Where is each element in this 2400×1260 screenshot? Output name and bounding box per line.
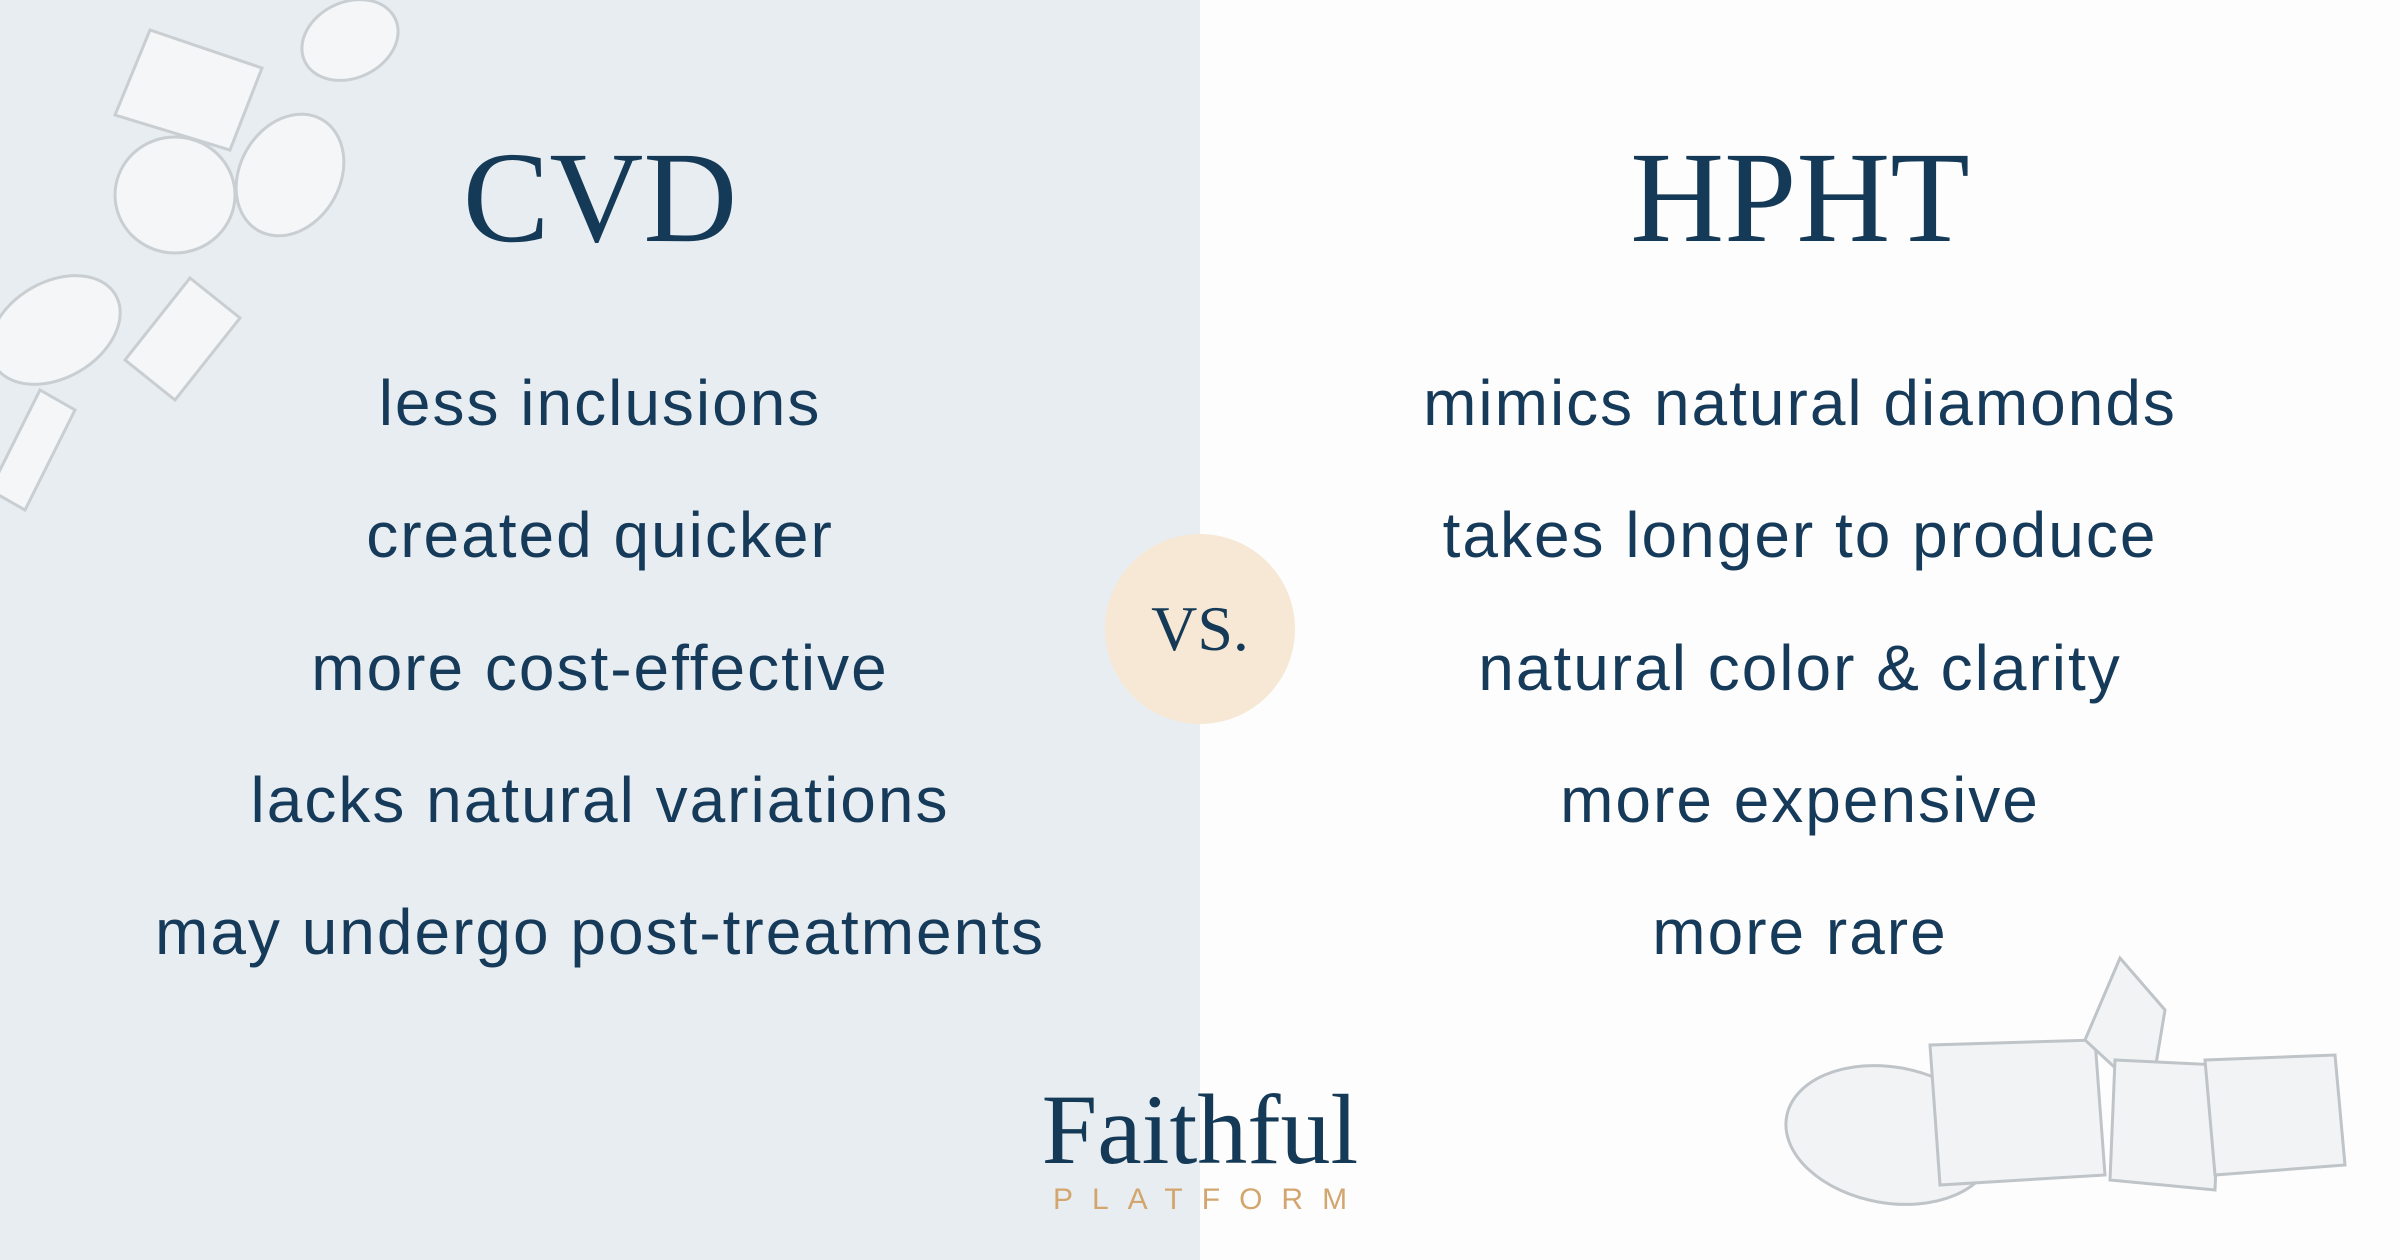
list: CVD traits: lacks natural variations [251,764,949,836]
list: CVD traits: may undergo post-treatments [155,896,1045,968]
logo: Faithful Platform: PLATFORM [1053,1183,1366,1216]
badge: VS: VS. [1151,593,1249,664]
panel: CVD [0,0,1200,1260]
list: HPHT traits: natural color & clarity [1478,632,2122,704]
list: CVD traits: less inclusions [379,367,821,439]
list: HPHT traits: more expensive [1560,764,2040,836]
list: HPHT traits: mimics natural diamonds [1423,367,2177,439]
list: HPHT traits: more rare [1652,896,1948,968]
list: CVD traits: more cost-effective [311,632,889,704]
list: HPHT traits: takes longer to produce [1443,499,2157,571]
heading: CVD: CVD [463,126,737,270]
icon: diamonds bottom-right [1784,955,2347,1206]
icon: diamonds top-left [0,0,400,512]
list: CVD traits: created quicker [366,499,834,571]
list: CVD traits [155,367,1045,968]
logo: Faithful Platform: Faithful [1042,1074,1358,1185]
panel: HPHT [1200,0,2400,1260]
badge: VS [1105,534,1295,724]
heading: HPHT: HPHT [1630,126,1970,270]
list: HPHT traits [1423,367,2177,968]
